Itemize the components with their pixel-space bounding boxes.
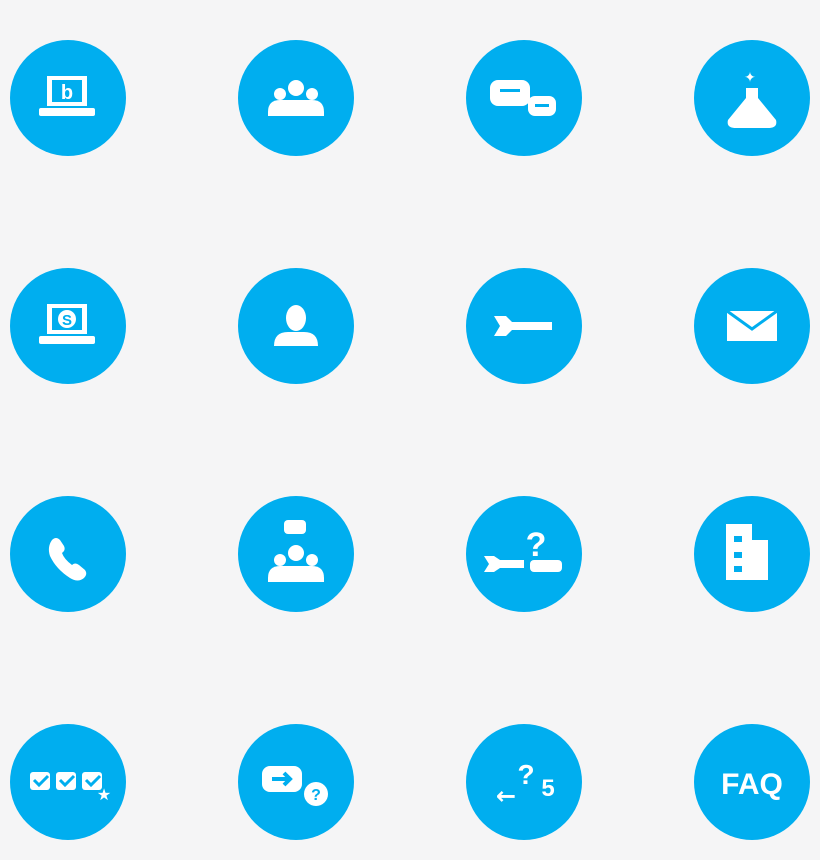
icon: wrench question — [466, 496, 582, 612]
icon: person — [238, 268, 354, 384]
icon: skype laptop: S — [62, 312, 72, 329]
icon: bing laptop — [10, 40, 126, 156]
icon: arrow bubble question: ? — [311, 787, 321, 804]
icon: FAQ — [694, 724, 810, 840]
icon: skype laptop — [10, 268, 126, 384]
icon: wrench — [466, 268, 582, 384]
icon: back arrow question: ← — [496, 782, 516, 810]
icon: checklist building — [694, 496, 810, 612]
icon: arrow bubble question — [238, 724, 354, 840]
icon: phone — [10, 496, 126, 612]
icon: group speaking — [238, 496, 354, 612]
icon: three checks star — [10, 724, 126, 840]
icon: back arrow question: 5 — [541, 775, 555, 802]
icon: back arrow question: ? — [517, 759, 535, 790]
icon: chat bubbles — [466, 40, 582, 156]
icon: FAQ: FAQ — [721, 768, 783, 801]
icon: three checks star: ★ — [97, 785, 111, 804]
icon: wrench question: ? — [526, 526, 546, 564]
icon: back arrow question — [466, 724, 582, 840]
icon: envelope — [694, 268, 810, 384]
icon: group — [238, 40, 354, 156]
icon: flask — [694, 40, 810, 156]
icon: bing laptop: b — [61, 82, 73, 104]
icon: flask: ✦ — [744, 70, 756, 86]
